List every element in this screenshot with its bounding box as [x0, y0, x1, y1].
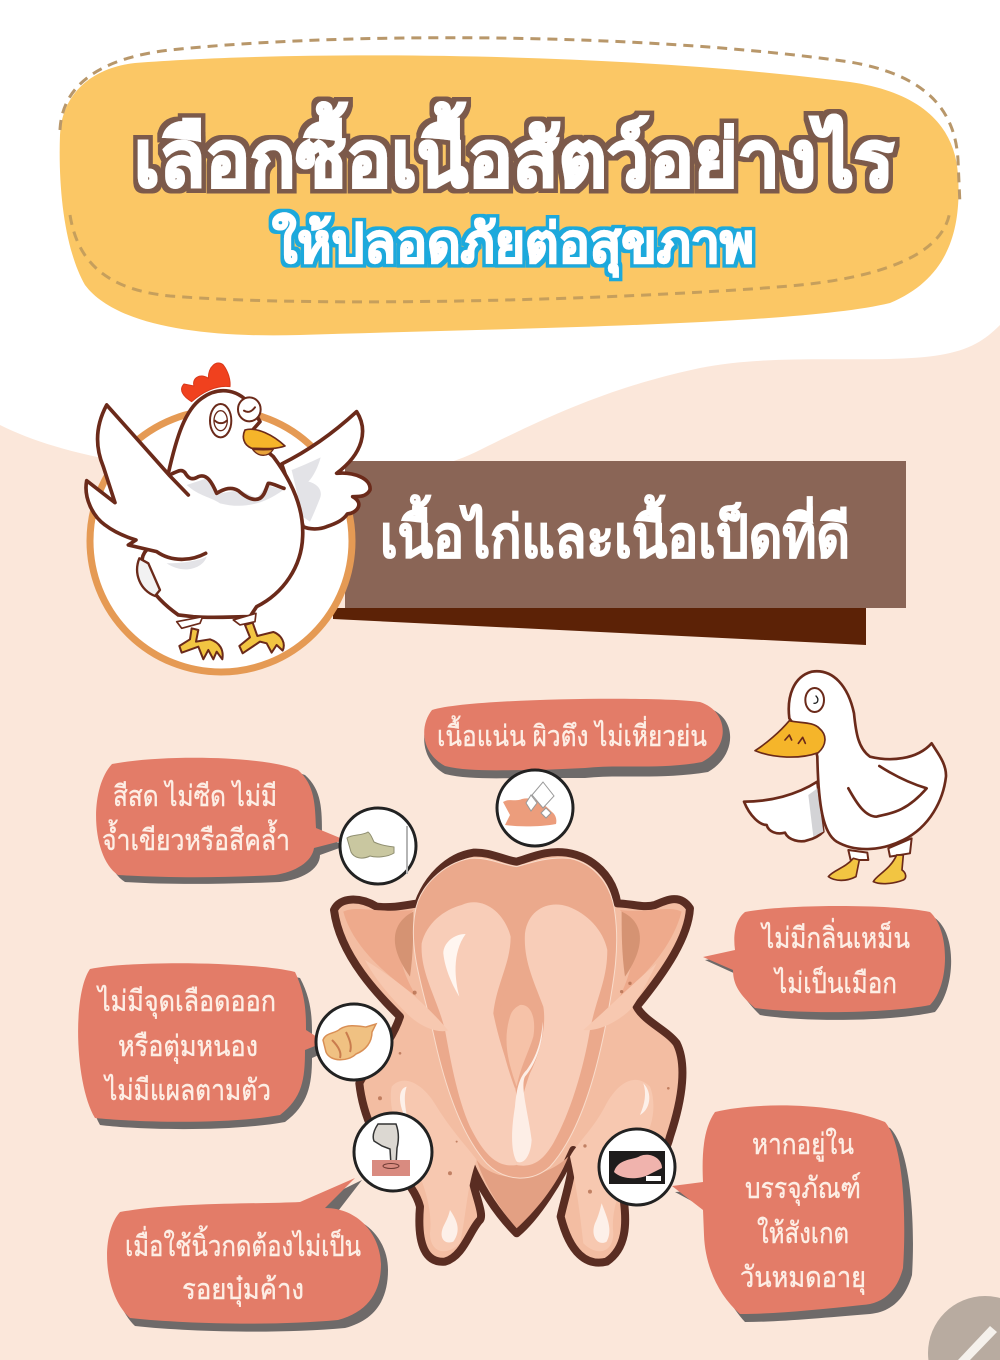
wing shadow — [292, 457, 321, 522]
breast center light — [506, 1005, 534, 1087]
icon: bruised chicken — [316, 1004, 392, 1080]
callout: blood spots bubble — [78, 963, 330, 1129]
left eyelid — [215, 421, 227, 423]
duck wing lines — [848, 766, 927, 817]
circle — [354, 1113, 432, 1191]
duck pupil — [814, 696, 818, 703]
banner shadow — [333, 608, 866, 645]
raw chicken thumbnail — [503, 798, 556, 826]
highlight: center streak — [512, 1022, 543, 1162]
right wing shade — [622, 912, 640, 977]
title banner — [60, 38, 960, 335]
duck left wing — [744, 782, 823, 841]
circle — [316, 1004, 392, 1080]
bubble shadow — [101, 763, 345, 884]
left wing outline — [86, 405, 206, 559]
callout: top bubble — [424, 699, 730, 778]
icon: cartoon duck — [744, 671, 946, 884]
bubble line 1: เมื่อใช้นิ้วกดต้องไม่เป็น — [125, 1225, 361, 1263]
left wing shade — [395, 912, 413, 977]
bubble line 1: สีสด ไม่ซีด ไม่มี — [113, 779, 277, 813]
circle — [340, 808, 416, 884]
right leg band — [233, 613, 256, 625]
leg highlight right — [640, 1083, 649, 1115]
bubble line 2: หรือตุ่มหนอง — [118, 1031, 258, 1064]
callout: colour bubble — [96, 758, 345, 884]
chicken body — [142, 391, 303, 617]
left leg band — [177, 617, 203, 628]
left wing — [86, 405, 206, 559]
icon: packaged meat — [599, 1129, 675, 1205]
right eye — [238, 397, 261, 421]
dashed inner outline — [70, 210, 950, 302]
pencil — [958, 1326, 997, 1360]
bubble line 2: บรรจุภัณฑ์ — [745, 1172, 861, 1206]
diamond 3 — [541, 808, 551, 818]
wing underside shadow — [167, 557, 207, 569]
comb — [182, 363, 230, 402]
highlight: left breast — [443, 934, 466, 997]
icon: firm meat — [497, 770, 573, 846]
left wing dark patch — [343, 909, 417, 997]
bubble line 3: ให้สังเกต — [757, 1216, 849, 1250]
bubble shadow — [112, 1180, 388, 1332]
skin spots — [378, 982, 670, 1194]
illustration: raw chicken — [334, 852, 690, 1263]
bill nostrils — [785, 735, 805, 743]
icon: cartoon chicken — [86, 363, 370, 659]
bubble line 2: จ้ำเขียวหรือสีคล้ำ — [102, 819, 290, 857]
bubble line 1: หากอยู่ใน — [752, 1127, 854, 1162]
circle — [497, 770, 573, 846]
duck eye — [805, 688, 824, 712]
yellow blob — [60, 55, 959, 335]
chicken badge circle — [90, 410, 352, 672]
breast center shade — [499, 960, 544, 1088]
chicken thumbnail — [323, 1024, 376, 1060]
background: peach wave — [0, 325, 1000, 1360]
duck left foot — [828, 858, 859, 880]
beak — [243, 429, 285, 449]
callout: packaging bubble — [672, 1105, 913, 1322]
subtitle text: ให้ปลอดภัยต่อสุขภาพ — [272, 212, 754, 278]
diamond 2 — [526, 795, 537, 811]
bubble shadow — [424, 703, 730, 778]
duck body and head — [789, 671, 946, 849]
bubble body — [96, 758, 345, 877]
leg highlights left — [391, 1081, 477, 1251]
vertical line — [406, 826, 408, 874]
neck shadow — [187, 478, 283, 506]
duck bill — [755, 721, 825, 757]
press ripple — [383, 1164, 399, 1168]
left eye inner ring — [214, 411, 227, 431]
right foot — [239, 623, 284, 653]
chicken bruises — [332, 1032, 351, 1058]
right wing dark patch — [620, 909, 682, 997]
drumstick highlight right — [593, 1203, 609, 1243]
torso outer — [413, 858, 617, 1178]
right breast — [516, 904, 607, 1166]
skin block — [372, 1160, 410, 1176]
chicken right wing — [282, 412, 370, 529]
bubble shadow — [675, 1111, 913, 1322]
left breast — [422, 902, 517, 1165]
bubble line 1: ไม่มีกลิ่นเหม็น — [760, 918, 910, 955]
bubble body — [424, 699, 723, 770]
bubble line 4: วันหมดอายุ — [740, 1262, 866, 1295]
lower beak — [253, 449, 273, 455]
duck legs — [848, 838, 912, 860]
drumstick highlight left — [442, 1210, 458, 1242]
left foot — [179, 628, 223, 659]
bubble line 2: รอยบุ๋มค้าง — [182, 1274, 304, 1307]
callout: press test bubble — [107, 1178, 388, 1332]
bubble shadow — [705, 910, 951, 1020]
meat piece — [347, 832, 394, 858]
right wing tip flap — [583, 963, 657, 1030]
legs and feet — [177, 613, 284, 659]
bottom tail flap — [477, 1157, 568, 1228]
bubble line 3: ไม่มีแผลตามตัว — [103, 1073, 271, 1107]
bubble shadow — [84, 969, 330, 1129]
raw chicken silhouette — [334, 852, 690, 1263]
bubble body — [672, 1105, 904, 1314]
section header banner — [333, 461, 906, 645]
dashed outer outline — [60, 38, 960, 205]
bubble line 1: ไม่มีจุดเลือดออก — [96, 984, 276, 1019]
icon: discoloured meat — [340, 808, 416, 884]
meat — [614, 1155, 662, 1178]
right eyelid — [244, 407, 255, 412]
left wing tip flap — [365, 960, 448, 1031]
icon: pencil badge — [928, 1296, 1000, 1360]
left eye — [210, 404, 231, 437]
neck feathers — [172, 471, 284, 499]
hand — [373, 1124, 398, 1165]
tail — [137, 558, 160, 596]
bubble line 2: ไม่เป็นเมือก — [773, 965, 897, 1000]
black tray — [609, 1151, 665, 1184]
callout: smell bubble — [703, 906, 951, 1020]
duck right foot — [873, 855, 906, 884]
banner text: เนื้อไก่และเนื้อเป็ดที่ดี — [380, 495, 850, 570]
title text: เลือกซื้อเนื้อสัตว์อย่างไร — [134, 102, 894, 203]
bubble body — [78, 963, 325, 1122]
bubble body — [107, 1178, 381, 1324]
bubble body — [703, 906, 945, 1012]
icon: finger press — [354, 1113, 432, 1191]
circle — [599, 1129, 675, 1205]
label — [646, 1176, 661, 1181]
banner box — [345, 461, 906, 608]
bubble text: เนื้อแน่น ผิวตึง ไม่เหี่ยวย่น — [437, 715, 707, 753]
leg highlight left — [400, 1087, 408, 1123]
leg highlights right — [570, 1080, 653, 1251]
badge circle — [928, 1296, 1000, 1360]
diamond 1 — [532, 782, 554, 808]
wing shadow — [808, 788, 823, 837]
